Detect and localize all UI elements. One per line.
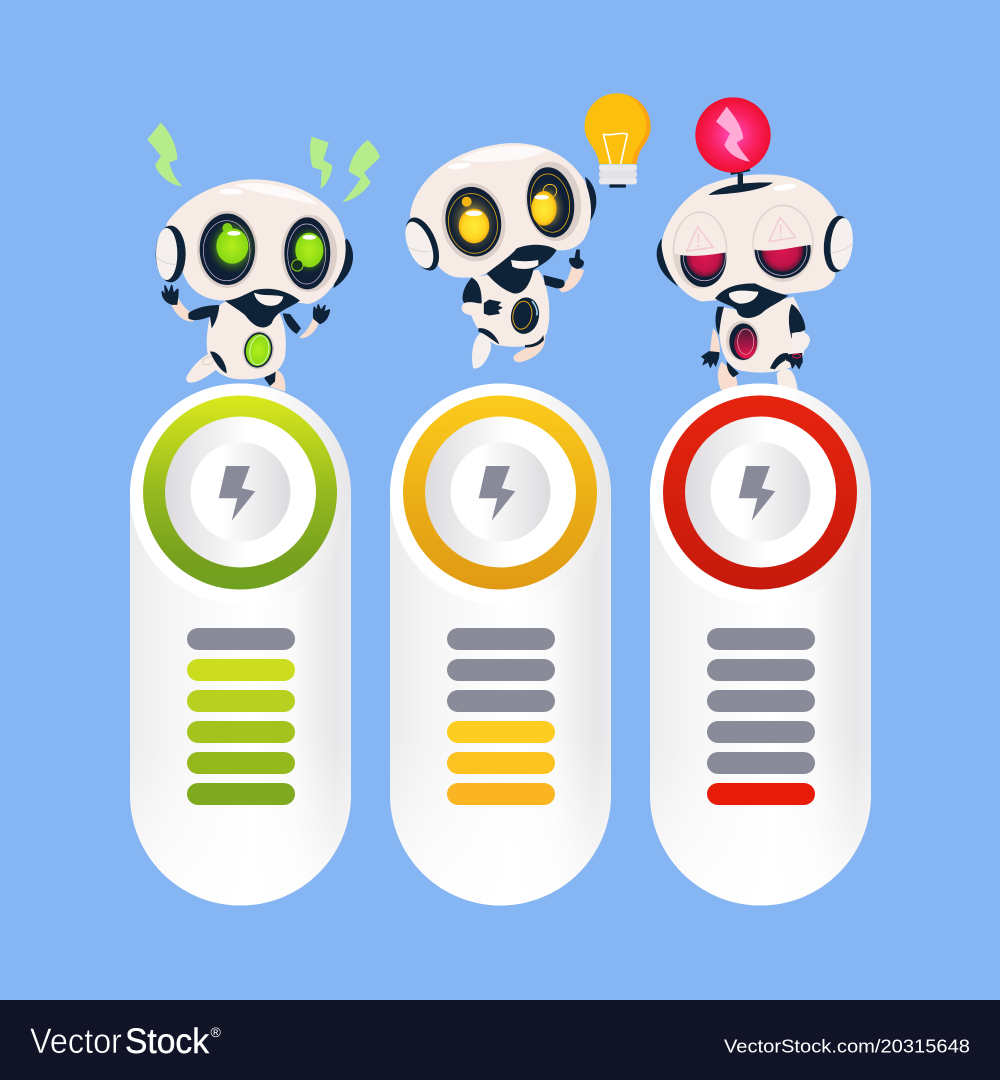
robot: red, low battery — [657, 97, 855, 390]
front ear — [156, 226, 186, 282]
icon: light bulb — [585, 93, 651, 188]
left eye with closing lid — [673, 211, 727, 289]
body markings — [463, 275, 565, 347]
level bars: three of six lit yellow — [447, 628, 555, 805]
left eye — [435, 178, 511, 267]
icon: green sparks — [147, 123, 380, 202]
back ear — [657, 238, 678, 287]
yellow ring — [403, 396, 597, 590]
alert ball on antenna — [695, 97, 771, 187]
right eye with closing lid — [752, 205, 814, 282]
left pupil — [459, 197, 489, 243]
icon: lightning bolt — [219, 466, 255, 521]
icon: lightning bolt — [479, 466, 515, 521]
level bars: five of six lit green — [187, 628, 295, 805]
icon: lightning bolt — [739, 466, 775, 521]
level bars: one of six lit red — [707, 628, 815, 805]
back ear — [333, 238, 353, 288]
watermark logo: Vector — [30, 1022, 122, 1061]
arm across chest — [462, 300, 502, 316]
head highlights — [447, 146, 547, 170]
body — [719, 297, 805, 373]
back ear — [585, 177, 596, 228]
head highlight — [773, 183, 797, 192]
watermark logo — [30, 1022, 222, 1061]
body — [207, 302, 286, 379]
head — [166, 179, 346, 304]
raised leg — [186, 352, 227, 383]
beard and mouth — [225, 289, 300, 327]
watermark logo: Stock — [125, 1022, 209, 1061]
beard and mouth — [715, 283, 788, 318]
right eye — [520, 158, 586, 245]
arms and legs — [710, 328, 798, 390]
gauge disc — [165, 416, 316, 568]
arms and legs — [513, 250, 584, 362]
chest light — [508, 295, 542, 336]
front ear — [822, 215, 855, 273]
chest light — [726, 321, 759, 361]
body markings — [188, 305, 301, 334]
head hatch — [708, 182, 773, 195]
body markings — [716, 304, 805, 377]
right arm — [792, 332, 810, 353]
hands — [702, 352, 802, 369]
panel: red battery — [650, 384, 871, 906]
footer bar — [0, 1000, 1000, 1080]
green ring — [143, 396, 337, 590]
gauge disc — [685, 416, 836, 568]
body — [467, 270, 549, 347]
panel: yellow battery — [390, 384, 611, 905]
right pupil — [531, 184, 557, 226]
gauge disc — [425, 416, 576, 568]
raised leg — [472, 328, 499, 369]
watermark logo: ® — [210, 1024, 222, 1040]
image id: VectorStock.com/20315648 — [724, 1036, 970, 1056]
head — [662, 174, 840, 302]
arms and legs — [162, 286, 329, 392]
robot: green, charged — [147, 123, 380, 392]
right eye — [281, 215, 337, 292]
head — [410, 143, 591, 278]
red ring — [663, 396, 857, 590]
front ear — [399, 213, 446, 275]
robot: yellow, with idea — [399, 93, 651, 369]
head highlights — [219, 183, 318, 205]
left eye — [197, 211, 258, 288]
panel: green battery — [130, 384, 351, 906]
beard and mouth — [487, 245, 557, 294]
chest light — [240, 328, 277, 372]
